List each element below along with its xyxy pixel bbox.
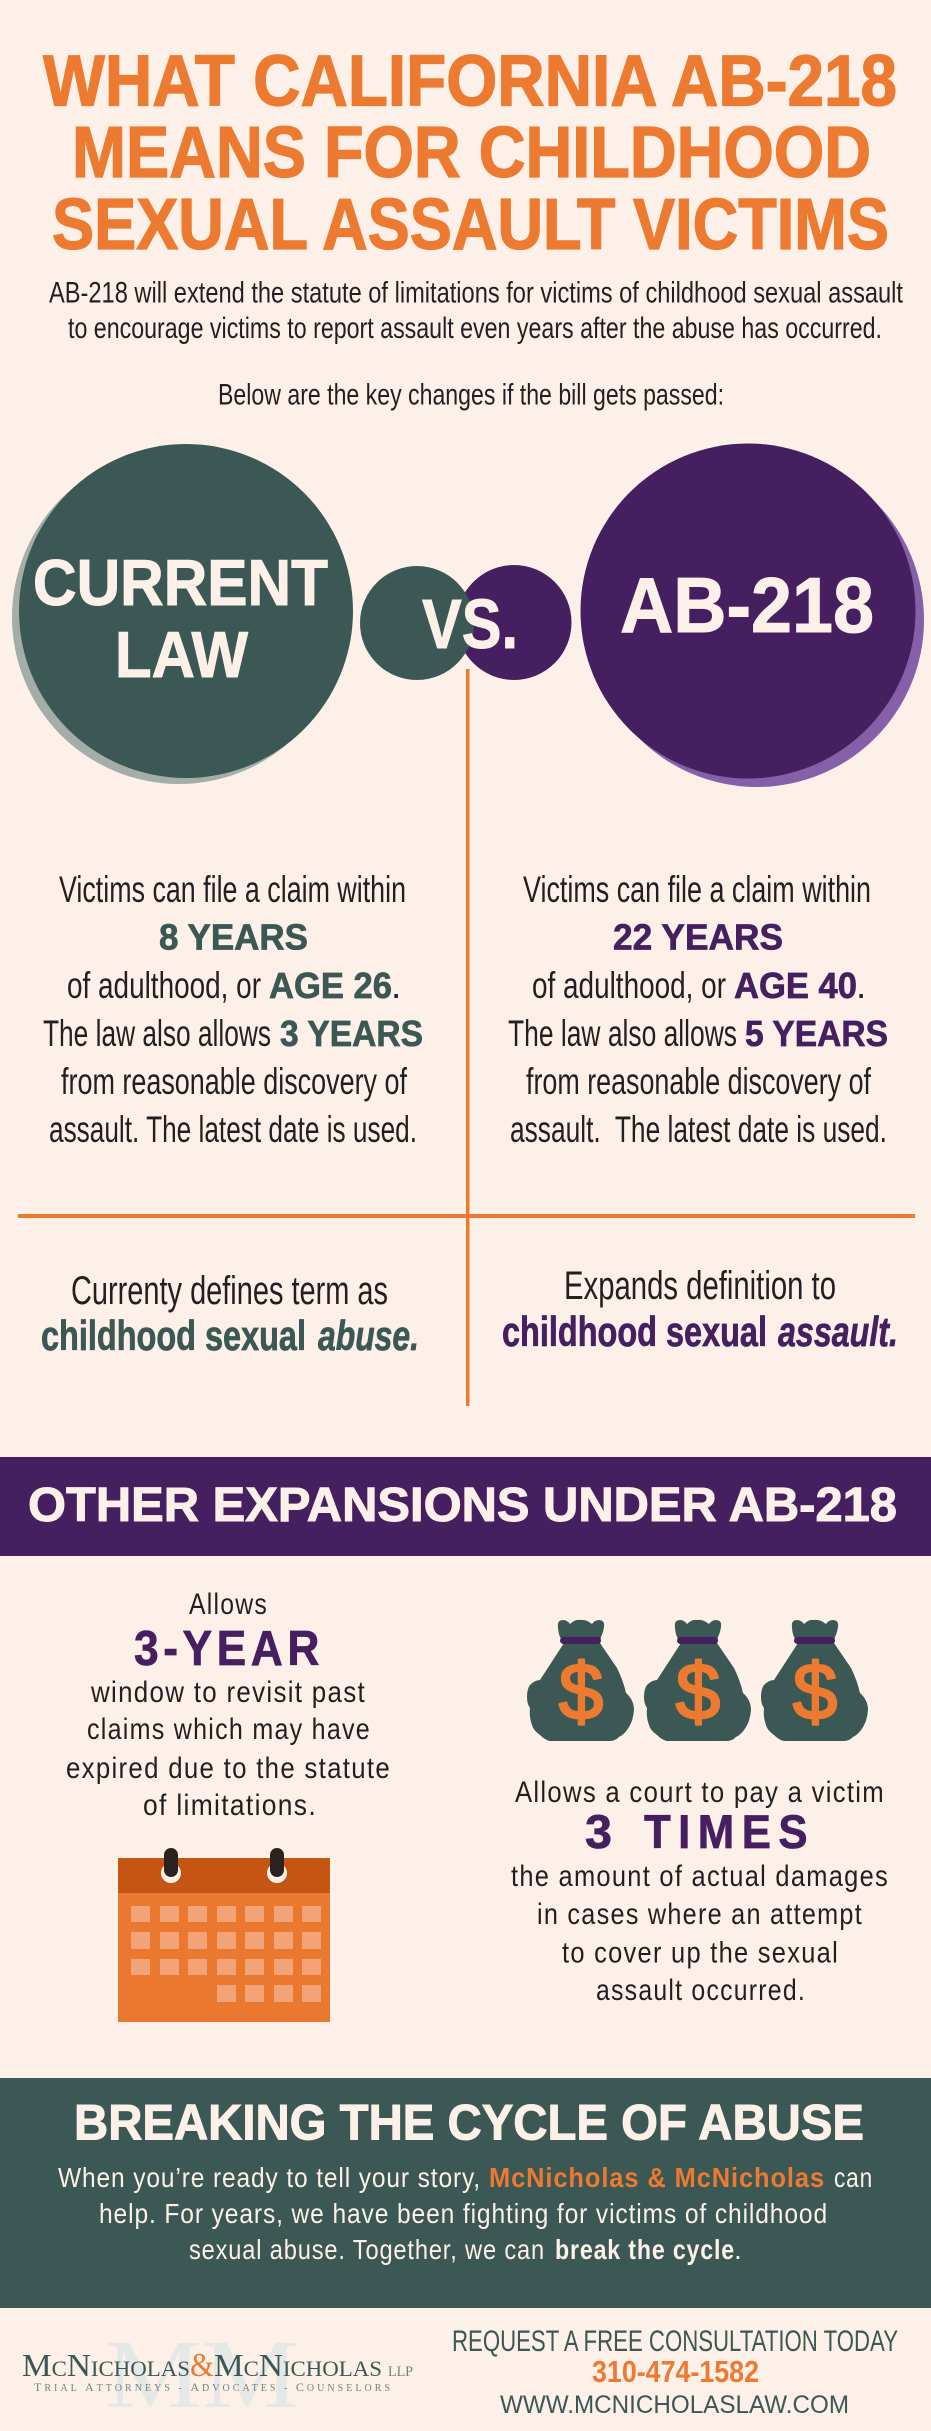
panel: expanded definition: Expands definition to [564,1264,836,1308]
icon: money bag 3: $ [793,1647,837,1736]
text block: 3-year window: Allows [189,1588,268,1621]
text block: 3 times damages: TIMES [644,1805,815,1858]
panel: AB-218 terms: AGE 40 [734,965,857,1006]
icon: money bag 1 [527,1620,634,1741]
icon: money bag 2 [644,1620,751,1741]
panel: AB-218 terms: . [856,965,866,1006]
vs badge: VS. [422,585,518,663]
text block: 3-year window: 3-YEAR [134,1622,324,1676]
banner paragraph: break the cycle [555,2234,735,2265]
banner paragraph: can [834,2162,873,2193]
logo: McNicholas & McNicholas LLP: T RIAL A TTORNEYS - A DVOCATES - C OUNSELORS [34,2380,390,2394]
logo: McNicholas & McNicholas LLP: LLP [388,2364,413,2380]
vs badge [360,565,572,680]
panel: AB-218 terms [508,869,888,1150]
circle: current law: CURRENT [33,546,328,619]
text block: 3 times damages: assault occurred. [596,1974,806,2007]
panel: current law terms: 3 YEARS [280,1013,423,1054]
circle: current law: LAW [115,618,249,691]
panel: current law terms: from reasonable discovery of [61,1061,408,1102]
panel: current law terms: of adulthood, or [67,965,261,1006]
section banner: other expansions [0,1457,931,1556]
banner paragraph: sexual abuse. Together, we can [189,2234,545,2265]
panel: AB-218 terms: 22 YEARS [613,916,783,958]
panel: current definition: childhood sexual [41,1312,306,1359]
panel: current law terms: AGE 26 [269,965,392,1006]
contact details [452,2325,898,2419]
logo: McNicholas & McNicholas LLP: MCNICHOLAS [22,2347,190,2383]
circle: AB-218: AB-218 [620,561,874,649]
intro text [49,276,904,345]
icon: money bag 3 [761,1620,868,1741]
panel: expanded definition [502,1264,898,1355]
divider: horizontal [18,1214,915,1218]
panel: current law terms [43,869,423,1150]
title [43,42,897,265]
text block: 3-year window: window to revisit past [90,1676,366,1709]
contact details: WWW.MCNICHOLASLAW.COM [500,2391,849,2419]
divider: vertical [466,669,470,1406]
section banner: breaking the cycle [0,2078,931,2308]
panel: AB-218 terms: 5 YEARS [745,1013,888,1054]
banner paragraph: When you’re ready to tell your story, [58,2162,481,2193]
panel: AB-218 terms: The law also allows [508,1013,737,1054]
section banner: other expansions: OTHER EXPANSIONS UNDER AB-218 [28,1479,897,1532]
icon: money bag 2: $ [676,1647,720,1736]
text block: 3-year window: expired due to the statute [66,1752,391,1785]
icon: calendar [118,1848,330,2022]
panel: current law terms: 8 YEARS [159,916,308,958]
banner paragraph: McNicholas & McNicholas [489,2162,825,2193]
circle: AB-218 [580,444,924,787]
banner heading: BREAKING THE CYCLE OF ABUSE [74,2094,864,2150]
text block: 3 times damages [511,1776,889,2007]
panel: current law terms: assault. The latest date is used. [49,1109,417,1150]
circle: current law [12,444,353,784]
panel: expanded definition: assault. [778,1308,898,1355]
text block: 3-year window [66,1588,391,1822]
panel: current law terms: The law also allows [43,1013,271,1054]
panel: current definition [41,1269,419,1359]
text block: 3 times damages: to cover up the sexual [562,1936,839,1970]
panel: current law terms: Victims can file a claim within [59,869,406,910]
text block: 3 times damages: in cases where an attempt [537,1898,863,1931]
banner paragraph: help. For years, we have been fighting for victims of childhood [99,2198,828,2229]
logo: McNicholas & McNicholas LLP: MM [105,2321,299,2428]
logo: McNicholas & McNicholas LLP: MCNICHOLAS [214,2347,382,2383]
text block: 3 times damages: 3 [585,1805,612,1858]
text block: 3-year window: of limitations. [143,1789,317,1822]
logo: McNicholas & McNicholas LLP: & [190,2347,214,2384]
key changes line: Below are the key changes if the bill gets passed: [218,378,724,412]
banner paragraph [58,2162,873,2265]
panel: current definition: Currenty defines term as [71,1269,388,1313]
text block: 3-year window: claims which may have [87,1713,371,1746]
contact details: 310-474-1582 [592,2354,759,2389]
logo: McNicholas & McNicholas LLP [22,2321,413,2428]
panel: AB-218 terms: of adulthood, or [532,965,726,1006]
panel: current definition: abuse. [318,1312,419,1359]
banner paragraph: . [734,2234,743,2265]
panel: expanded definition: childhood sexual [502,1308,767,1355]
icon: money bag 1: $ [559,1647,603,1736]
panel: current law terms: . [391,965,401,1006]
